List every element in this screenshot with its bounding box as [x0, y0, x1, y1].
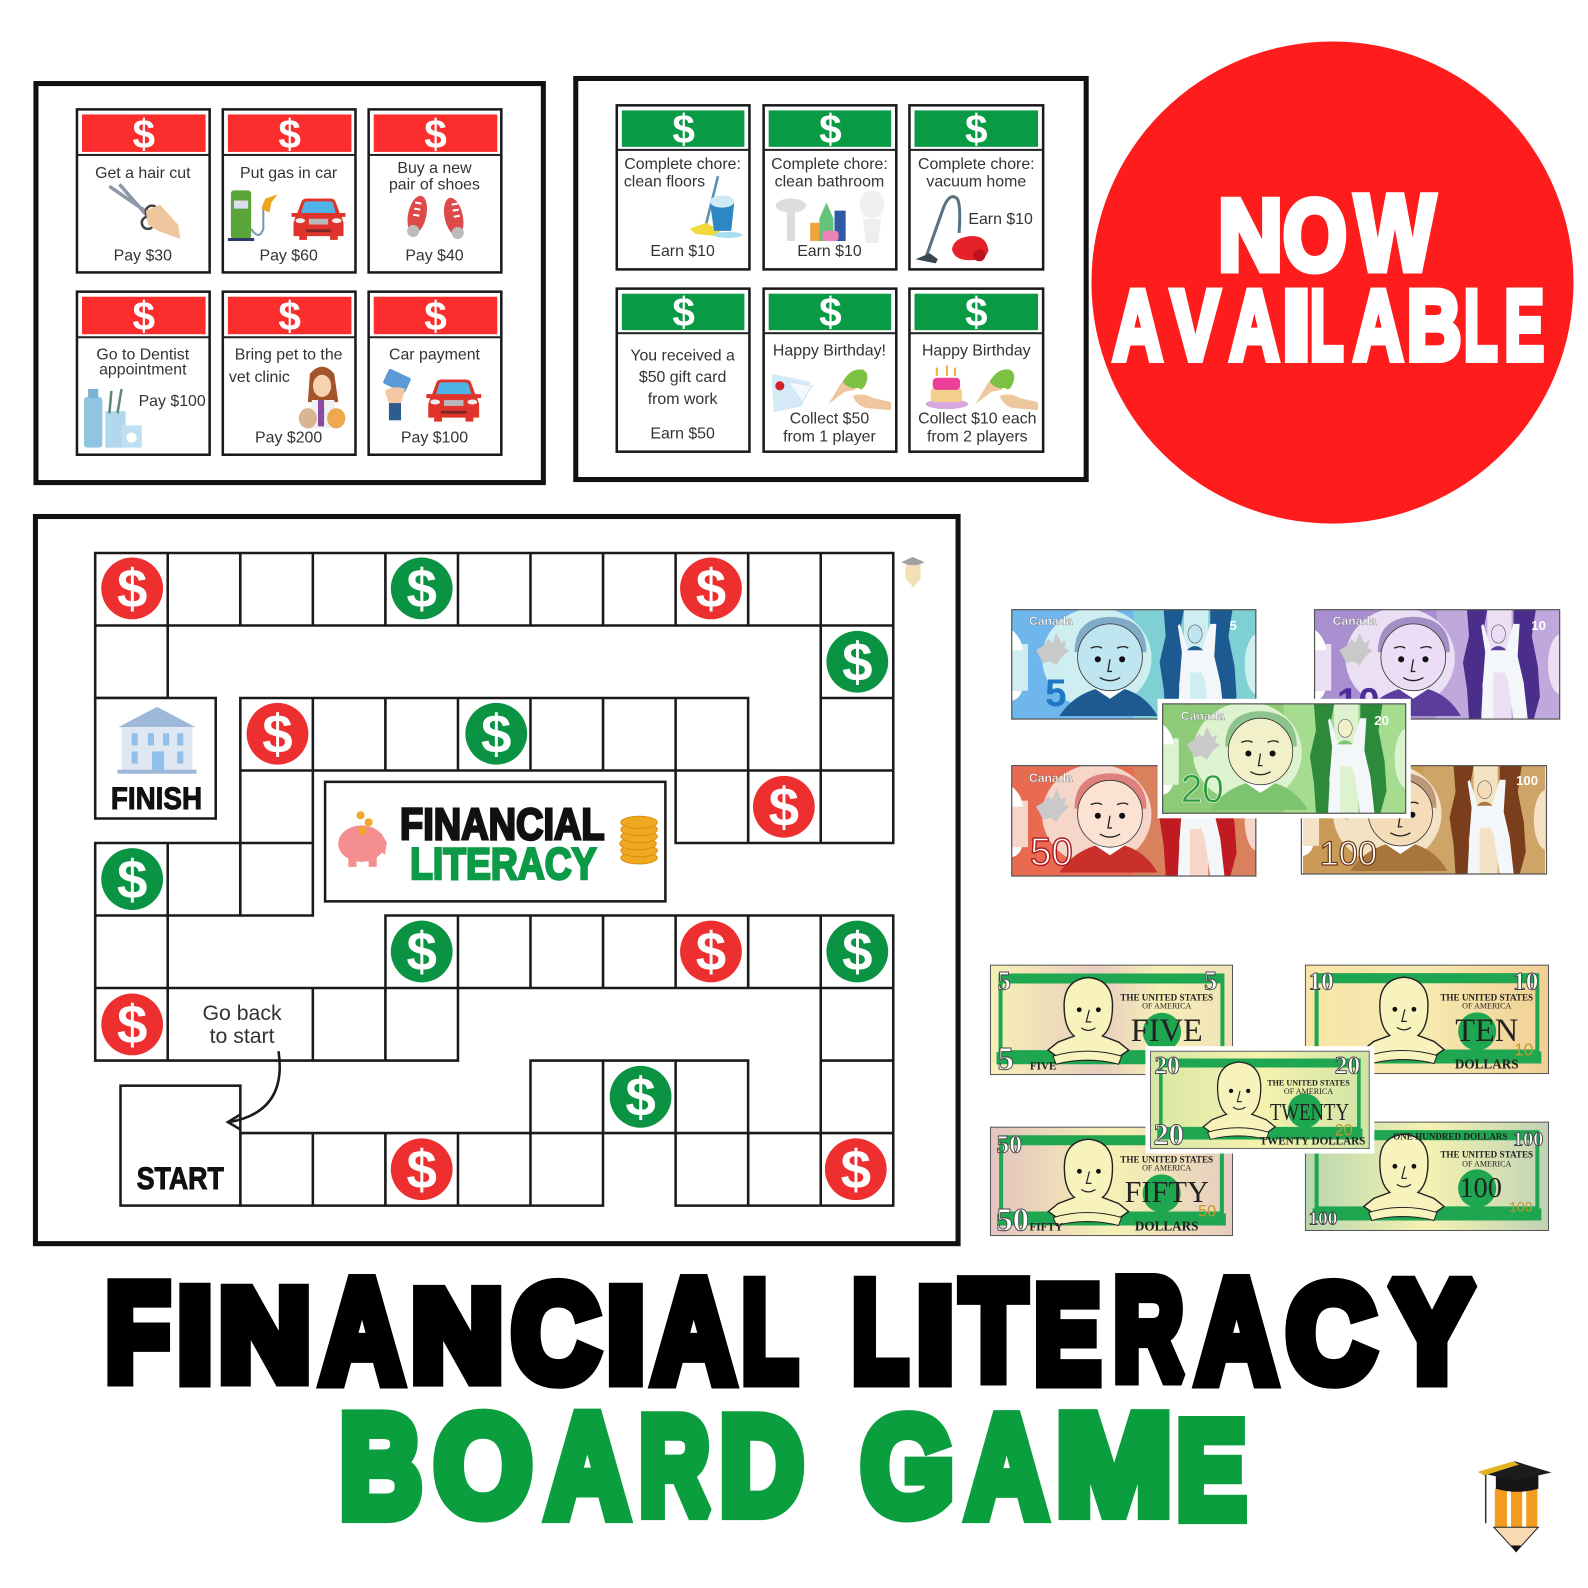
bill: us 10: 10 [1513, 967, 1538, 995]
dollar spaces: $ [842, 921, 873, 983]
bill: us 50 [990, 1127, 1233, 1238]
bill: us 50: DOLLARS [1135, 1218, 1198, 1233]
card: clean floors [617, 105, 749, 269]
card: birthday, 1 player: Collect $50 [790, 410, 869, 427]
title: financial literacy: I [917, 1261, 954, 1408]
card: clean bathroom [764, 105, 896, 269]
bill: canadian 50: 50 [1030, 831, 1073, 874]
dollar spaces: $ [625, 1066, 656, 1128]
card: birthday, 2 players: Happy Birthday [922, 342, 1031, 359]
badge: now available: L [1310, 271, 1343, 382]
bill: us 50: OF AMERICA [1142, 1164, 1191, 1173]
icon: piggy bank [338, 811, 387, 867]
bill: us 20: TWENTY DOLLARS [1260, 1135, 1365, 1147]
bill: canadian 50: Canada [1029, 771, 1073, 785]
card: clean floors: $ [672, 106, 695, 152]
card: put gas in car: $ [278, 111, 301, 157]
bill: us 50: 50 [997, 1202, 1029, 1238]
panel: game board [35, 517, 958, 1244]
canadian banknotes [1012, 608, 1574, 876]
dollar spaces: $ [696, 558, 726, 620]
badge: now available: A [1354, 271, 1403, 382]
finish space [95, 698, 216, 819]
card: vet clinic: Pay $200 [255, 430, 322, 447]
card: dentist: Pay $100 [139, 393, 206, 410]
title: financial literacy: C [1287, 1256, 1375, 1409]
bill: us 100: 100 [1308, 1208, 1337, 1229]
card: birthday, 2 players: Collect $10 each [918, 410, 1036, 427]
icon: birthday cake [926, 366, 968, 409]
center logo box [325, 782, 665, 901]
icon: small pencil logo [901, 557, 925, 587]
card: vacuum home: Earn $10 [968, 211, 1033, 228]
card: buy new shoes: Pay $40 [405, 247, 464, 264]
dollar spaces: $ [117, 558, 147, 620]
logo title: LITERACY [410, 840, 597, 889]
title: board game: G [861, 1389, 954, 1544]
badge: now available: I [1282, 271, 1311, 382]
badge: now available [1090, 42, 1574, 524]
card: clean bathroom: clean bathroom [775, 173, 884, 190]
badge: now available: B [1407, 271, 1461, 382]
bill: canadian 10: 10 [1531, 618, 1546, 633]
card: vacuum home: $ [965, 106, 988, 152]
bill: us 100: 100 [1513, 1128, 1543, 1150]
bill: us 50: 50 [997, 1131, 1022, 1159]
card: clean floors: Complete chore: [624, 156, 741, 173]
logo title: FINANCIAL [400, 801, 605, 850]
card: dentist [77, 292, 210, 455]
bill: us 10: THE UNITED STATES [1440, 993, 1533, 1003]
bill: us 100: 100 [1509, 1199, 1533, 1215]
card: get a hair cut [77, 109, 210, 272]
bill: us 100: ONE HUNDRED DOLLARS [1393, 1131, 1507, 1141]
dollar spaces: $ [842, 631, 873, 693]
title: board game: A [546, 1384, 628, 1547]
card: dentist: $ [133, 293, 155, 339]
card: buy new shoes: $ [424, 111, 447, 157]
icon: shoes [404, 194, 467, 239]
bill: us 5: OF AMERICA [1142, 1002, 1191, 1011]
logo title [400, 801, 605, 889]
title: financial literacy: I [607, 1261, 645, 1408]
bill: us 100: OF AMERICA [1462, 1160, 1512, 1169]
title: board game: R [640, 1389, 709, 1543]
title: financial literacy: A [653, 1249, 735, 1412]
start space: START [137, 1161, 224, 1196]
bill: canadian 5 [1012, 608, 1271, 719]
bill: us 5: THE UNITED STATES [1120, 993, 1213, 1003]
bill: us 100: THE UNITED STATES [1440, 1150, 1533, 1160]
icon: gas pump [228, 190, 277, 241]
card: vet clinic: $ [278, 293, 301, 339]
card: gift card [617, 289, 749, 452]
card: buy new shoes [369, 109, 501, 272]
bill: us 100: 100 [1459, 1173, 1502, 1204]
card: clean bathroom: Complete chore: [771, 156, 888, 173]
card: birthday, 2 players: $ [965, 289, 988, 335]
dollar spaces: $ [769, 776, 799, 838]
title: financial literacy: A [1197, 1249, 1277, 1412]
title: financial literacy: E [1035, 1257, 1100, 1410]
dollar spaces: $ [262, 703, 293, 765]
card: car payment [369, 292, 501, 455]
bill: us 20: OF AMERICA [1284, 1087, 1333, 1096]
icon: bank building [117, 707, 196, 774]
title: financial literacy: T [961, 1251, 1026, 1408]
bill: canadian 20 [1158, 699, 1421, 818]
panel: expense cards [36, 84, 543, 483]
card: vacuum home: vacuum home [926, 173, 1026, 190]
dollar spaces: $ [117, 848, 147, 910]
card: clean floors: clean floors [624, 173, 705, 190]
card: clean floors: Earn $10 [650, 243, 715, 260]
bill: canadian 10: Canada [1333, 614, 1377, 628]
bill: canadian 20: 20 [1374, 713, 1389, 728]
card: dentist: appointment [99, 362, 187, 379]
bill: us 5: 5 [998, 1041, 1014, 1077]
bill: canadian 100: 100 [1320, 835, 1377, 873]
title: financial literacy: A [321, 1249, 403, 1412]
card: put gas in car: Put gas in car [240, 165, 338, 182]
badge: now available: L [1464, 271, 1497, 382]
bill: us 20: 20 [1335, 1121, 1353, 1139]
bill: us 10: OF AMERICA [1462, 1002, 1512, 1011]
card: dentist: Go to Dentist [96, 347, 190, 364]
bill: us 20: THE UNITED STATES [1267, 1079, 1350, 1088]
card: get a hair cut: Get a hair cut [95, 165, 191, 182]
bill: us 10: 10 [1308, 967, 1334, 995]
bill: us 20 [1145, 1046, 1374, 1154]
title: financial literacy: L [742, 1253, 798, 1411]
card: put gas in car: Pay $60 [259, 247, 318, 264]
board path squares [95, 553, 893, 1206]
card: car payment: Pay $100 [401, 430, 468, 447]
icon: vacuum cleaner [916, 197, 988, 263]
bill: canadian 5: 5 [1229, 618, 1237, 633]
card: vet clinic: vet clinic [229, 369, 290, 386]
title: financial literacy: Y [1390, 1253, 1474, 1411]
bill: us 10 [1305, 965, 1549, 1074]
title: board game: D [720, 1389, 803, 1543]
icon: red car [292, 199, 345, 240]
bill: us 5: 5 [998, 966, 1011, 995]
title: financial literacy: R [1114, 1250, 1183, 1409]
bill: us 10: 10 [1514, 1039, 1533, 1059]
dollar spaces: $ [841, 1138, 871, 1200]
bill: us 5: 5 [1204, 966, 1217, 995]
icon: hands passing money [828, 369, 891, 410]
icon: vet with pets [299, 367, 345, 428]
us banknotes [990, 965, 1549, 1238]
bill: us 20: 20 [1335, 1052, 1360, 1080]
go back to start label [202, 1001, 282, 1048]
bill: us 20: TWENTY [1270, 1099, 1349, 1126]
badge: now available: A [1113, 271, 1162, 382]
badge: now available: W [1355, 173, 1436, 293]
bill: us 5: DOLLARS [1153, 1057, 1217, 1072]
icon: red car [426, 379, 481, 422]
bill: canadian 20: Canada [1181, 709, 1225, 723]
card: vet clinic [223, 292, 355, 455]
finish space: FINISH [111, 781, 202, 816]
card: gift card: $50 gift card [639, 369, 726, 386]
bill: canadian 20: 20 [1181, 768, 1224, 811]
bill: canadian 100 [1301, 764, 1560, 874]
bill: canadian 10 [1315, 608, 1574, 724]
title: financial literacy: C [512, 1256, 599, 1409]
card: vacuum home [909, 105, 1043, 269]
card: put gas in car [223, 109, 355, 272]
card: vet clinic: Bring pet to the [235, 347, 343, 364]
card: clean bathroom: Earn $10 [797, 243, 862, 260]
badge: now available: A [1229, 271, 1279, 382]
bill: us 5: FIVE [1131, 1013, 1203, 1049]
bill: us 20: 20 [1154, 1117, 1184, 1151]
go back to start label: Go back [202, 1001, 282, 1025]
card: buy new shoes: Buy a new [397, 160, 472, 177]
title: financial literacy: L [852, 1253, 908, 1411]
title: board game: B [340, 1385, 422, 1547]
dollar spaces: $ [481, 703, 511, 765]
badge: now available: V [1171, 271, 1220, 382]
card: gift card: You received a [630, 348, 735, 365]
bill: us 50: THE UNITED STATES [1120, 1155, 1213, 1165]
card: birthday, 1 player: Happy Birthday! [773, 342, 886, 359]
badge: now available: E [1504, 271, 1544, 382]
card: vacuum home: Complete chore: [918, 156, 1035, 173]
badge: now available: O [1283, 179, 1347, 292]
panel: income cards [576, 78, 1086, 480]
badge: now available: N [1218, 179, 1283, 292]
go back to start label: to start [210, 1024, 275, 1048]
bill: canadian 100: 100 [1516, 773, 1538, 788]
bill: us 10: DOLLARS [1455, 1056, 1519, 1071]
icon: dental supplies [84, 389, 142, 448]
bill: us 5 [990, 965, 1233, 1077]
bill: canadian 5: Canada [1029, 614, 1073, 628]
bill: us 50: FIFTY [1029, 1221, 1063, 1233]
card: car payment: Car payment [389, 347, 481, 364]
icon: mop and bucket [690, 176, 742, 238]
card: car payment: $ [424, 293, 447, 339]
bill: us 100 [1305, 1122, 1549, 1230]
title: board game: E [1177, 1393, 1246, 1546]
bill: us 10: TEN [1455, 1013, 1518, 1049]
card: gift card: from work [648, 391, 718, 408]
card: buy new shoes: pair of shoes [389, 176, 480, 193]
bill: us 50: FIFTY [1124, 1175, 1209, 1209]
card: gift card: $ [672, 289, 695, 335]
dollar spaces: $ [117, 994, 147, 1056]
title: financial literacy: F [106, 1255, 170, 1408]
dollar spaces: $ [407, 1138, 437, 1200]
title: financial literacy: I [178, 1261, 212, 1408]
bill: us 50: 50 [1198, 1202, 1216, 1220]
card: clean bathroom: $ [819, 106, 842, 152]
title: board game: O [434, 1387, 532, 1544]
bill: canadian 50 [1012, 764, 1271, 876]
icon: sink, cleaners, toilet [776, 190, 884, 243]
card: get a hair cut: Pay $30 [114, 247, 172, 264]
bill: canadian 10: 10 [1337, 681, 1380, 724]
title: financial literacy: N [219, 1264, 310, 1407]
icon: scissors and hand [109, 184, 180, 239]
card: gift card: Earn $50 [650, 426, 715, 443]
start space [121, 1086, 240, 1206]
icon: envelope [772, 374, 812, 412]
arrow to start [228, 1051, 280, 1129]
card: birthday, 1 player: from 1 player [783, 429, 877, 446]
icon: stack of coins [620, 816, 657, 864]
bill: canadian 5: 5 [1045, 672, 1067, 715]
dollar spaces: $ [696, 921, 726, 983]
icon: hand with card [383, 368, 411, 420]
card: birthday, 1 player: $ [819, 289, 842, 335]
dollar spaces: $ [407, 921, 437, 983]
title: board game: M [1056, 1386, 1172, 1543]
bill: us 5: FIVE [1030, 1060, 1056, 1072]
card: birthday, 2 players: from 2 players [927, 429, 1028, 446]
icon: hands passing money [975, 369, 1038, 410]
card: birthday, 1 player [764, 289, 896, 452]
title: board game: A [967, 1387, 1047, 1547]
bill: us 20: 20 [1155, 1052, 1180, 1080]
title: financial literacy: N [412, 1264, 503, 1407]
card: birthday, 2 players [909, 289, 1043, 452]
dollar spaces [101, 558, 888, 1200]
dollar spaces: $ [407, 558, 437, 620]
card: get a hair cut: $ [133, 111, 155, 157]
icon: pencil with graduation cap [1479, 1461, 1552, 1553]
